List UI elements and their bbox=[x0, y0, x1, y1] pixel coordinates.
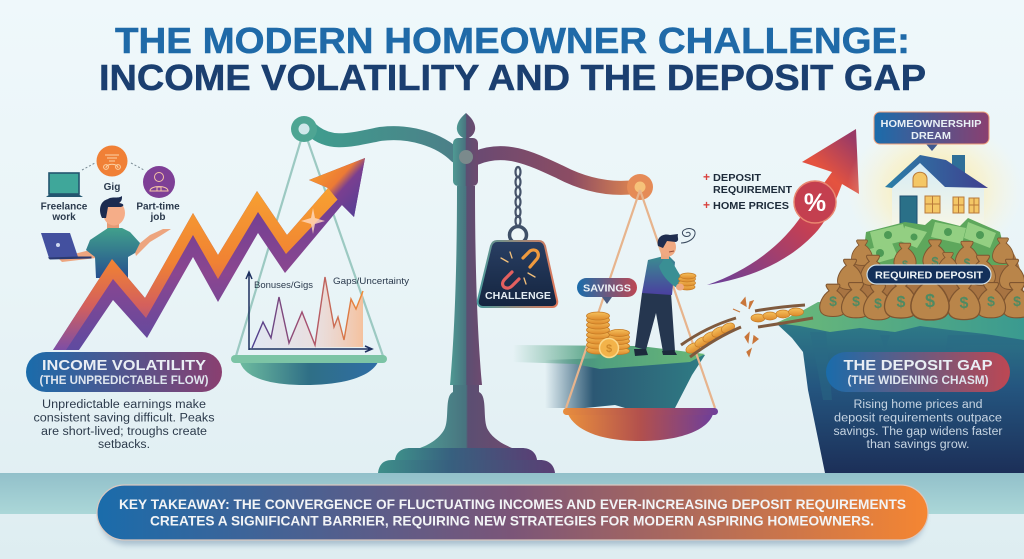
plus deposit: + bbox=[703, 170, 710, 184]
knob bbox=[420, 385, 512, 448]
left beam bbox=[312, 130, 456, 156]
chart axes bbox=[246, 272, 372, 352]
back bags: $ bbox=[931, 254, 939, 269]
rock bbox=[545, 355, 705, 408]
takeaway text: CREATES A SIGNIFICANT BARRIER, REQUIRING NEW STRATEGIES FOR MODERN ASPIRING HOMEOWNERS. bbox=[150, 512, 874, 528]
label: gaps: Gaps/Uncertainty bbox=[333, 276, 409, 287]
work type icons bbox=[41, 146, 180, 223]
gap heading: (THE WIDENING CHASM) bbox=[848, 375, 989, 387]
orange ribbon bbox=[53, 188, 340, 350]
requirement text: REQUIREMENT bbox=[713, 184, 793, 196]
panel: income volatility bbox=[26, 352, 222, 451]
round window bbox=[913, 172, 927, 187]
front bags: $ bbox=[960, 295, 969, 312]
required deposit label bbox=[867, 265, 991, 284]
savings coins bbox=[586, 312, 630, 358]
back bags: $ bbox=[964, 256, 971, 270]
front bags: $ bbox=[874, 295, 882, 311]
right pan strings bbox=[566, 190, 715, 408]
challenge label: CHALLENGE bbox=[485, 290, 551, 302]
front bags: $ bbox=[897, 294, 906, 311]
icon: freelance laptop bbox=[46, 173, 83, 197]
finial bbox=[457, 113, 475, 139]
worried man bbox=[634, 229, 696, 356]
torso bbox=[642, 255, 675, 295]
income heading: (THE UNPREDICTABLE FLOW) bbox=[40, 375, 209, 387]
pan bowl bbox=[240, 362, 378, 385]
deposit text: DEPOSIT bbox=[713, 172, 762, 184]
ring bbox=[510, 226, 526, 244]
label: freelance work: Freelance bbox=[41, 202, 88, 212]
required deposit label: REQUIRED DEPOSIT bbox=[875, 270, 984, 282]
plus home: + bbox=[703, 198, 710, 212]
connector dashes bbox=[82, 163, 144, 170]
debris bbox=[733, 298, 758, 356]
collar bolt bbox=[459, 150, 473, 164]
sparkle bbox=[301, 208, 325, 234]
home prices text: HOME PRICES bbox=[713, 200, 789, 212]
income description: are short-lived; troughs create bbox=[41, 426, 207, 438]
label: gig: Gig bbox=[104, 182, 120, 193]
upper base bbox=[395, 448, 537, 460]
front bags bbox=[820, 273, 1024, 320]
stem bbox=[450, 186, 482, 385]
dream label: DREAM bbox=[911, 130, 951, 142]
challenge weight bbox=[478, 167, 557, 307]
volatile income arrow bbox=[53, 158, 365, 350]
label: bonuses: Bonuses/Gigs bbox=[254, 280, 313, 291]
arrow body bbox=[53, 158, 365, 350]
gap heading: THE DEPOSIT GAP bbox=[844, 357, 992, 374]
income worker bbox=[41, 196, 171, 278]
income description bbox=[34, 399, 215, 451]
front bags: $ bbox=[852, 293, 860, 309]
right cliff bbox=[776, 302, 1024, 473]
rising costs labels bbox=[703, 170, 793, 212]
label: freelance work bbox=[41, 202, 88, 223]
chain bbox=[516, 167, 520, 226]
front bags: $ bbox=[829, 293, 837, 309]
panel: deposit gap bbox=[826, 352, 1010, 451]
front bags: $ bbox=[925, 291, 935, 311]
window 1 bbox=[925, 196, 940, 213]
dream label bbox=[874, 112, 989, 151]
income description: Unpredictable earnings make bbox=[42, 399, 206, 411]
balance scale post bbox=[291, 113, 653, 473]
neck bbox=[661, 252, 669, 259]
chimney bbox=[952, 155, 965, 173]
savings label bbox=[577, 278, 637, 304]
short stack bbox=[608, 329, 630, 355]
savings label: SAVINGS bbox=[583, 282, 631, 294]
wall bbox=[892, 163, 984, 226]
back bags bbox=[838, 238, 1024, 290]
held coins bbox=[678, 273, 696, 290]
collar bbox=[453, 138, 478, 186]
income heading: INCOME VOLATILITY bbox=[42, 357, 206, 374]
arrow head bbox=[309, 158, 365, 217]
label: part-time job bbox=[136, 202, 180, 223]
label: freelance work: work bbox=[51, 212, 76, 223]
frown bbox=[669, 251, 674, 252]
left scale pan bbox=[231, 130, 387, 385]
right pivot bbox=[627, 174, 653, 200]
worry swirl bbox=[681, 229, 695, 243]
right scale pan bbox=[563, 190, 718, 441]
pan strings bbox=[236, 130, 383, 356]
head bbox=[660, 238, 676, 256]
pan rim bbox=[231, 355, 387, 363]
weight body bbox=[478, 241, 557, 307]
right arm bbox=[134, 229, 171, 256]
takeaway shadow bbox=[100, 491, 925, 545]
grass bbox=[513, 345, 705, 369]
income description: consistent saving difficult. Peaks bbox=[34, 412, 215, 424]
right beam bbox=[476, 153, 635, 188]
trousers bbox=[635, 293, 675, 352]
gap heading bbox=[826, 352, 1010, 392]
left forearm bbox=[58, 250, 96, 262]
broken link icon bbox=[501, 250, 538, 288]
gap description: Rising home prices and bbox=[854, 399, 982, 411]
house glow bbox=[847, 118, 1023, 262]
volatility mini chart bbox=[246, 272, 409, 352]
back bags: $ bbox=[902, 259, 908, 271]
neck bbox=[107, 222, 119, 232]
right pan bowl bbox=[568, 414, 713, 441]
lower base bbox=[378, 460, 555, 473]
shoes bbox=[634, 349, 677, 356]
window 2 bbox=[953, 197, 964, 213]
gap description: savings. The gap widens faster bbox=[834, 426, 1003, 438]
front bags: $ bbox=[1013, 293, 1021, 309]
lower band bbox=[0, 473, 1024, 514]
dollar coin: $ bbox=[606, 343, 612, 355]
door bbox=[900, 196, 917, 226]
key takeaway bbox=[97, 485, 928, 545]
right pan rim bbox=[563, 408, 718, 415]
tall stack bbox=[586, 312, 610, 354]
arm bbox=[659, 256, 683, 289]
front bags: $ bbox=[987, 293, 995, 309]
gap description bbox=[834, 399, 1003, 451]
label: part-time job: Part-time bbox=[136, 202, 180, 212]
income heading bbox=[26, 352, 222, 392]
title bbox=[99, 20, 926, 98]
hair bbox=[100, 196, 123, 218]
laptop bbox=[41, 233, 91, 259]
chart line bbox=[252, 277, 363, 348]
roof bbox=[885, 155, 988, 188]
takeaway text: KEY TAKEAWAY: THE CONVERGENCE OF FLUCTUATING INCOMES AND EVER-INCREASING DEPOSIT REQUIREMENTS bbox=[119, 496, 906, 512]
label: part-time job: job bbox=[150, 212, 166, 223]
right bridge section bbox=[751, 305, 813, 327]
bag pile backdrop bbox=[825, 240, 1024, 312]
title: INCOME VOLATILITY AND THE DEPOSIT GAP bbox=[99, 57, 926, 98]
gap description: than savings grow. bbox=[866, 439, 970, 451]
percent badge bbox=[794, 181, 836, 223]
takeaway pill bbox=[97, 485, 928, 540]
icon: gig bbox=[96, 146, 128, 176]
homeownership dream house bbox=[885, 155, 988, 226]
hand bbox=[676, 284, 684, 290]
left pivot bbox=[291, 116, 317, 142]
rising red arrow bbox=[707, 129, 859, 285]
icon: part-time job bbox=[143, 166, 175, 198]
percent badge: % bbox=[804, 189, 826, 217]
window 3 bbox=[969, 198, 979, 213]
head bbox=[103, 200, 125, 226]
title: THE MODERN HOMEOWNER CHALLENGE: bbox=[115, 20, 910, 61]
chart area bbox=[252, 277, 363, 348]
left cliff bbox=[513, 345, 705, 408]
left bridge section bbox=[681, 318, 741, 357]
torso bbox=[86, 228, 140, 278]
cash pile bbox=[862, 218, 1008, 265]
takeaway text bbox=[119, 496, 906, 528]
hair bbox=[658, 234, 678, 248]
broken bridge bbox=[681, 298, 813, 357]
income description: setbacks. bbox=[98, 439, 150, 451]
money bags bbox=[820, 238, 1024, 320]
gap description: deposit requirements outpace bbox=[834, 412, 1002, 424]
dream label: HOMEOWNERSHIP bbox=[880, 118, 982, 130]
